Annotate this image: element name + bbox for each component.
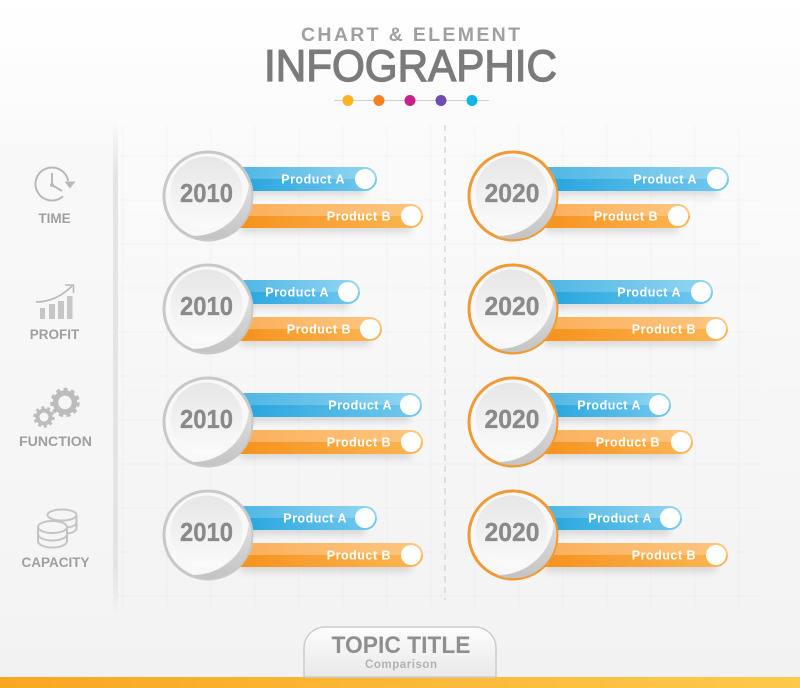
badge: 2010 [164,152,252,240]
row 3 right: 2020 [469,378,693,466]
icon: coins [38,510,76,548]
badge: 2020: 2020 [484,404,540,434]
bar: product A: Product A [281,172,345,186]
bar: product A [545,280,713,309]
bar: product B: Product B [596,436,660,450]
bar: product A [545,167,729,196]
bar: product B [545,543,728,572]
badge: 2020 [469,265,557,353]
row 3 left: 2010 [164,378,423,466]
badge: 2010 [164,491,252,579]
bar: product B [545,317,728,346]
badge: 2010: 2010 [180,404,233,434]
bar: product B: Product B [327,210,391,224]
heading: infographic: INFOGRAPHIC [264,42,557,91]
bar: product A: Product A [577,398,641,412]
bar: product B: Product B [327,548,391,562]
badge: 2010 [164,378,252,466]
icon: gears [35,390,78,426]
label: time: TIME [38,211,71,226]
bar: product B: Product B [632,548,696,562]
bar: product B [240,543,423,572]
bar: product B [240,204,423,233]
row 2 right: 2020 [469,265,728,353]
bar: product A: Product A [328,398,392,412]
label: profit: PROFIT [30,327,80,342]
bar: product B [240,317,382,346]
badge: 2020 [469,378,557,466]
title dots divider [334,95,489,106]
bar: product B: Product B [287,322,351,336]
badge: 2020: 2020 [484,517,540,547]
bar: product A [240,167,377,196]
badge: 2020 [469,152,557,240]
row 4 right: 2020 [469,491,728,579]
topic title text: TOPIC TITLE [332,632,470,659]
subtitle: chart and element: CHART & ELEMENT [301,24,520,46]
topic title tab [304,627,496,677]
bar: product B [240,430,423,459]
label: function: FUNCTION [19,434,92,449]
side panel: categories [0,120,118,616]
bar: product A: Product A [283,512,347,526]
bar: product A [240,506,377,535]
center dashed divider [444,125,446,600]
bar: product B: Product B [632,322,696,336]
badge: 2010: 2010 [180,291,233,321]
bar: product B [545,204,690,233]
badge: 2020: 2020 [484,178,540,208]
badge: 2020 [469,491,557,579]
row 4 left: 2010 [164,491,423,579]
badge: 2010 [164,265,252,353]
footer bar [0,677,800,688]
bar: product A [545,393,671,422]
bar: product A: Product A [633,172,697,186]
bar: product A: Product A [617,286,681,300]
bar: product A [240,280,360,309]
bar: product A: Product A [588,512,652,526]
badge: 2020: 2020 [484,291,540,321]
topic subtitle text: Comparison [365,659,437,671]
bar: product B: Product B [327,436,391,450]
row 1 right: 2020 [469,152,729,240]
bar: product A [240,393,422,422]
bar: product B: Product B [594,210,658,224]
bar: product A [545,506,682,535]
badge: 2010: 2010 [180,178,233,208]
icon: profit chart [36,285,74,319]
badge: 2010: 2010 [180,517,233,547]
icon: clock [35,168,76,201]
title [264,24,557,91]
row 1 left: 2010 [164,152,423,240]
bar: product A: Product A [265,286,329,300]
label: capacity: CAPACITY [21,555,90,570]
bar: product B [545,430,693,459]
row 2 left: 2010 [164,265,382,353]
